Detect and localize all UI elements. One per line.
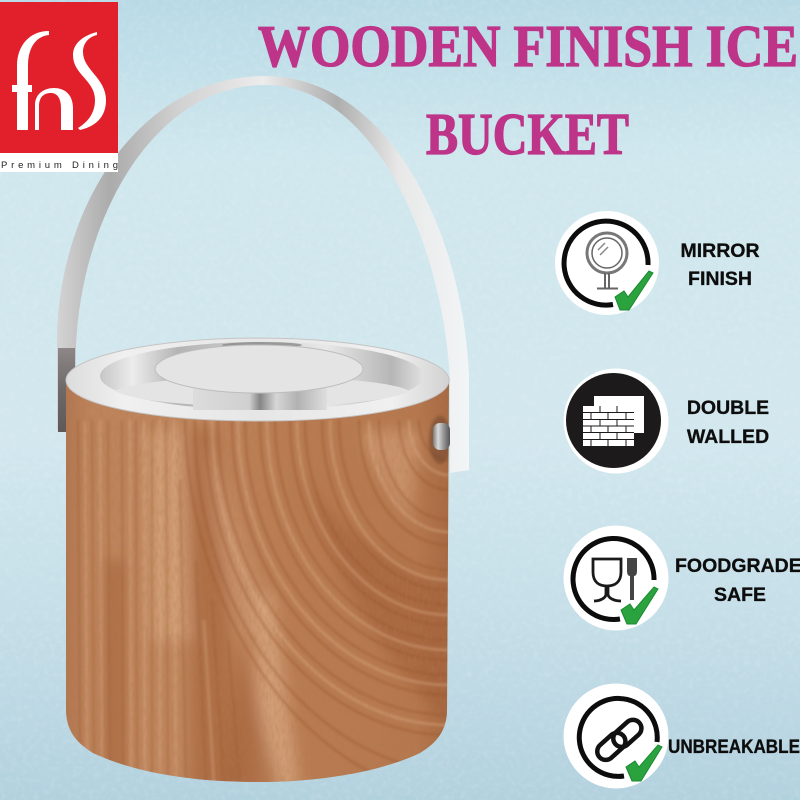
icon: mirror with check — [555, 211, 659, 315]
feature: mirror finish — [555, 211, 760, 315]
lid knob stem — [193, 388, 327, 410]
logo: FnS Premium Dining — [0, 2, 118, 172]
label: double walled: WALLED — [687, 426, 769, 448]
label: double walled — [687, 397, 769, 448]
feature: unbreakable — [564, 684, 800, 788]
lid ledge — [115, 377, 410, 407]
title: Wooden Finish Ice Bucket: BUCKET — [426, 101, 629, 167]
lid recess — [100, 342, 424, 410]
rim: steel ring — [66, 338, 449, 421]
label: foodgrade safe: SAFE — [714, 584, 766, 606]
bucket body: wood grain — [60, 380, 455, 790]
title: Wooden Finish Ice Bucket — [258, 13, 798, 167]
label: foodgrade safe — [675, 555, 800, 606]
ice bucket product photo — [57, 76, 469, 790]
label: mirror finish — [680, 240, 760, 290]
lid knob: flat disc — [155, 345, 363, 393]
handle bracket shadow — [429, 416, 451, 464]
logo: FnS Premium Dining: Premium Dining — [1, 160, 118, 171]
label: mirror finish: MIRROR — [680, 240, 760, 262]
icon: brick walls — [564, 368, 668, 474]
rivet: right handle pivot — [433, 423, 450, 450]
label: foodgrade safe: FOODGRADE — [675, 555, 800, 577]
icon: chain link with check — [564, 684, 668, 788]
handle: steel strap — [57, 76, 469, 473]
feature: food grade safe — [564, 526, 800, 630]
handle: dark lower end — [58, 348, 75, 432]
label: mirror finish: FINISH — [688, 268, 752, 290]
label: double walled: DOUBLE — [687, 397, 769, 419]
icon: glass and fork with check — [564, 526, 668, 630]
feature: double walled — [564, 368, 769, 474]
